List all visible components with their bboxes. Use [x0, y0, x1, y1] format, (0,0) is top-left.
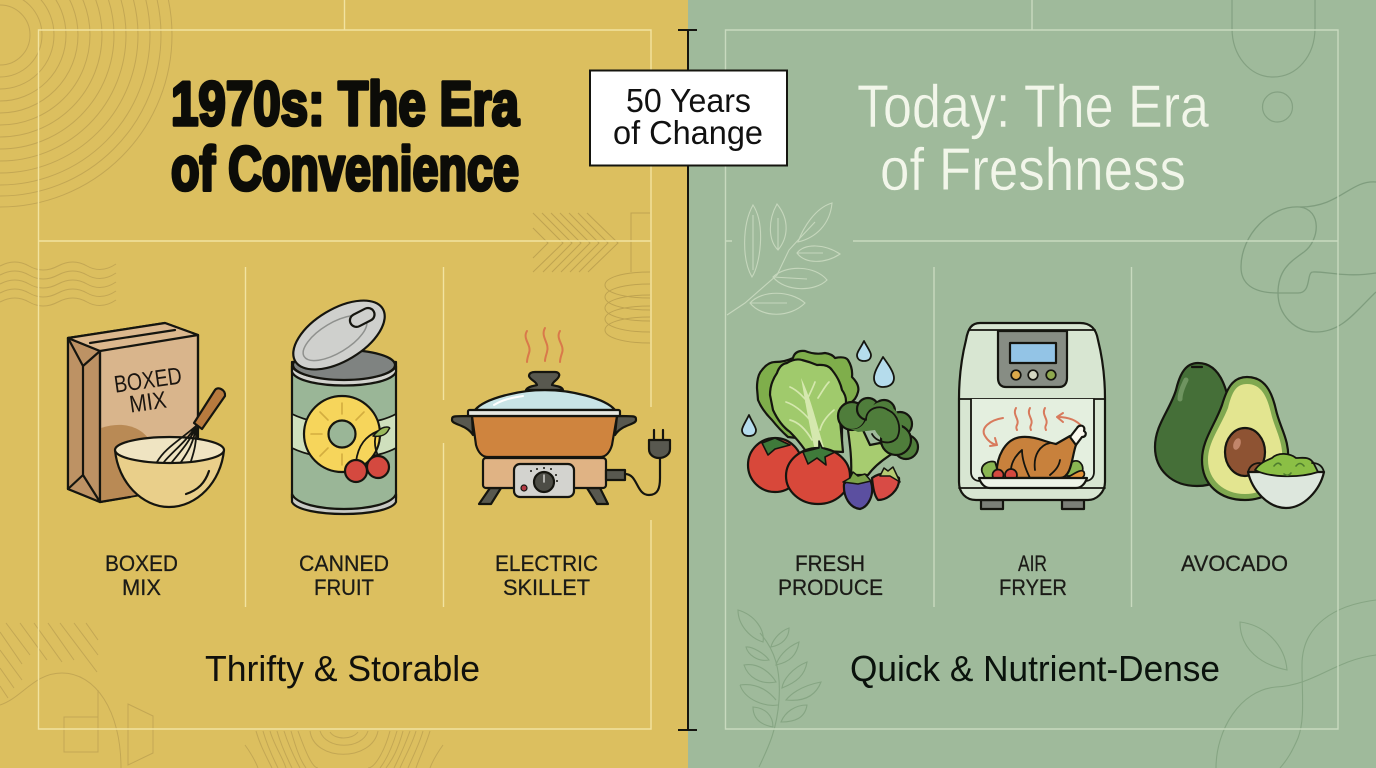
label: boxed mix: BOXED	[105, 551, 178, 576]
icon: boxed mix	[68, 323, 225, 507]
label: fresh produce: PRODUCE	[778, 575, 883, 600]
decoration: arch and circle	[1232, 0, 1315, 122]
timeline divider	[678, 30, 697, 730]
label: air fryer: AIR	[1018, 551, 1047, 576]
callout: 50 years of change: of Change	[613, 114, 763, 151]
label: boxed mix: MIX	[122, 575, 161, 600]
decoration: contour arcs top left	[0, 0, 172, 207]
decoration: leaf branch top	[727, 203, 840, 315]
callout: 50 years of change	[590, 70, 787, 166]
label: canned fruit: FRUIT	[314, 575, 374, 600]
title: today	[857, 73, 1210, 203]
label: canned fruit: CANNED	[299, 551, 389, 576]
title: today: Today: The Era	[857, 73, 1210, 140]
tagline: quick: Quick & Nutrient-Dense	[850, 648, 1220, 689]
label: boxed mix	[105, 551, 178, 600]
label: electric skillet: SKILLET	[503, 575, 590, 600]
decoration: wavy lines	[0, 262, 116, 306]
title: 1970s: 1970s: The Era	[171, 70, 519, 139]
decoration: leaf branch bottom	[738, 610, 821, 767]
decoration: organic blob	[1241, 182, 1376, 332]
panel: today	[688, 0, 1376, 768]
label: avocado: AVOCADO	[1181, 551, 1288, 576]
label: air fryer	[999, 551, 1067, 600]
callout: 50 years of change: 50 Years	[626, 82, 751, 119]
icon: avocado	[1155, 363, 1324, 508]
decoration: chevrons and coil	[533, 213, 650, 343]
label: fresh produce	[778, 551, 883, 600]
icon: boxed mix: MIX	[128, 387, 168, 419]
label: electric skillet	[495, 551, 598, 600]
tagline: thrifty: Thrifty & Storable	[205, 648, 480, 689]
frame lines	[726, 0, 1338, 729]
title: 1970s: of Convenience	[171, 135, 519, 204]
label: electric skillet: ELECTRIC	[495, 551, 598, 576]
frame lines	[38, 0, 651, 729]
title: today: of Freshness	[880, 136, 1186, 203]
panel: 1970s	[0, 0, 688, 768]
icon: boxed mix: BOXED	[112, 362, 184, 399]
label: air fryer: FRYER	[999, 575, 1067, 600]
label: fresh produce: FRESH	[795, 551, 865, 576]
decoration: contour lines bottom	[245, 731, 443, 768]
icon: canned fruit	[282, 286, 396, 514]
label: canned fruit	[299, 551, 389, 600]
icon: electric skillet	[452, 328, 670, 504]
decoration: hatch and shapes bottom left	[0, 623, 153, 768]
decoration: leaf and curves bottom right	[1216, 600, 1376, 768]
title: 1970s	[171, 70, 519, 204]
icon: fresh produce	[742, 341, 918, 509]
icon: air fryer	[959, 323, 1105, 509]
